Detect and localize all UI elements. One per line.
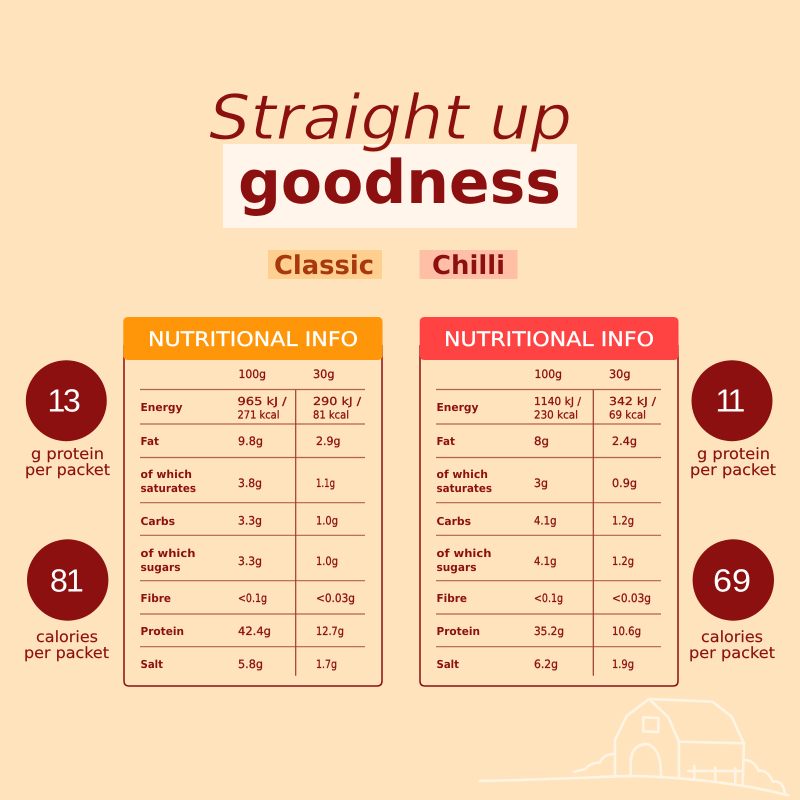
stat: 69 calories per packet [689, 539, 775, 662]
row: sugars: 1.0g [316, 554, 338, 568]
row: protein [140, 624, 344, 638]
legend: Chilli: Chilli [432, 251, 505, 281]
table header: NUTRITIONAL INFO [148, 327, 358, 351]
row: salt: 1.9g [612, 657, 634, 671]
row: salt [140, 657, 337, 671]
title: goodness highlight box [223, 144, 577, 228]
row: saturates: 3g [534, 476, 548, 490]
row: energy: 965 kJ / [238, 395, 287, 408]
stat: 81 calories per packet [24, 539, 109, 662]
row: carbs: Carbs [436, 515, 471, 528]
row: energy: 81 kcal [313, 408, 349, 422]
row: saturates: of which [140, 468, 192, 481]
panel: Chilli nutritional info [420, 317, 678, 686]
row: fibre: <0.03g [612, 591, 651, 605]
row: energy: Energy [140, 401, 182, 414]
row: sugars: 4.1g [534, 554, 556, 568]
row: sugars: sugars [436, 561, 477, 574]
stat: 11 g protein per packet [690, 360, 776, 479]
row: fat: Fat [140, 435, 159, 448]
stat: 69 calories per packet: 69 [713, 563, 751, 599]
row: saturates [140, 468, 335, 495]
row: saturates: 1.1g [316, 476, 335, 490]
column headings: 100g [534, 367, 562, 381]
column headings: 30g [313, 367, 334, 381]
stat: 81 calories per packet: 81 [50, 563, 84, 599]
stat: 11 g protein per packet: per packet [690, 461, 776, 479]
stat: 13 g protein per packet: 13 [48, 383, 81, 419]
row: protein: Protein [140, 625, 184, 638]
row: salt: 5.8g [238, 657, 263, 671]
row: saturates: saturates [436, 482, 492, 495]
row: carbs: 1.0g [316, 514, 338, 528]
stat: 69 calories per packet: per packet [689, 644, 775, 662]
row: fat [436, 434, 637, 448]
row: sugars: 1.2g [612, 554, 634, 568]
column headings: 100g [238, 367, 266, 381]
column headings [238, 367, 334, 381]
stat: 11 g protein per packet: g protein [697, 445, 770, 463]
row: fibre: Fibre [140, 592, 171, 605]
row: sugars: 3.3g [238, 554, 262, 568]
title: goodness: goodness [238, 148, 561, 218]
row: fat: 2.4g [612, 434, 637, 448]
stat: 13 g protein per packet [25, 360, 110, 479]
stat: 81 calories per packet: per packet [24, 644, 109, 662]
panel: Classic nutritional info [123, 317, 383, 686]
table frame [124, 345, 382, 686]
row: fat [140, 434, 340, 448]
row: saturates: 0.9g [612, 476, 637, 490]
row: carbs: 3.3g [238, 514, 262, 528]
row: fibre: <0.1g [238, 591, 267, 605]
row: fibre: Fibre [436, 592, 467, 605]
row: fat: Fat [436, 435, 455, 448]
row: sugars: sugars [140, 561, 181, 574]
row: salt [436, 657, 634, 671]
table header: NUTRITIONAL INFO [444, 327, 654, 351]
table header [123, 317, 383, 360]
row: fibre [140, 591, 355, 605]
row: energy: Energy [436, 401, 478, 414]
row: energy [140, 395, 361, 422]
row: saturates [436, 468, 637, 495]
row: sugars: of which [140, 547, 196, 560]
row: fat: 9.8g [238, 434, 263, 448]
row: energy: 1140 kJ / [534, 395, 581, 408]
row: energy: 342 kJ / [609, 395, 656, 408]
stat: 13 g protein per packet: g protein [31, 445, 104, 463]
row: protein [436, 624, 641, 638]
row: saturates: of which [436, 468, 488, 481]
row: carbs: Carbs [140, 515, 175, 528]
row: fibre: <0.03g [316, 591, 355, 605]
row: sugars: of which [436, 547, 492, 560]
row: energy: 69 kcal [609, 408, 646, 422]
table frame [420, 345, 678, 686]
row: saturates: 3.8g [238, 476, 262, 490]
row: protein: Protein [436, 625, 480, 638]
row: sugars [436, 547, 634, 574]
row: carbs [140, 514, 338, 528]
title: Straight up: Straight up [209, 81, 572, 154]
row: salt: Salt [436, 658, 459, 671]
row: energy: 290 kJ / [313, 395, 361, 408]
row: protein: 12.7g [316, 624, 344, 638]
column headings [534, 367, 630, 381]
row: fat: 2.9g [316, 434, 340, 448]
row: protein: 42.4g [238, 624, 271, 638]
row: carbs: 1.2g [612, 514, 634, 528]
row: saturates: saturates [140, 482, 196, 495]
row: salt: 6.2g [534, 657, 558, 671]
row: energy: 230 kcal [534, 408, 578, 422]
row: fat: 8g [534, 434, 549, 448]
icon: barn illustration [480, 699, 788, 795]
row: carbs [436, 514, 634, 528]
legend: Classic: Classic [274, 251, 374, 281]
column headings: 30g [609, 367, 630, 381]
table header [420, 317, 678, 360]
stat: 69 calories per packet: calories [701, 628, 763, 646]
row: salt: 1.7g [316, 657, 337, 671]
stat: 13 g protein per packet: per packet [25, 461, 110, 479]
row: protein: 35.2g [534, 624, 564, 638]
row: carbs: 4.1g [534, 514, 556, 528]
stat: 81 calories per packet: calories [36, 628, 98, 646]
stat: 11 g protein per packet: 11 [716, 383, 745, 419]
row: salt: Salt [140, 658, 163, 671]
row: fibre [436, 591, 651, 605]
row: energy: 271 kcal [238, 408, 280, 422]
row: fibre: <0.1g [534, 591, 563, 605]
row: protein: 10.6g [612, 624, 641, 638]
row: sugars [140, 547, 338, 574]
row: energy [436, 395, 656, 422]
